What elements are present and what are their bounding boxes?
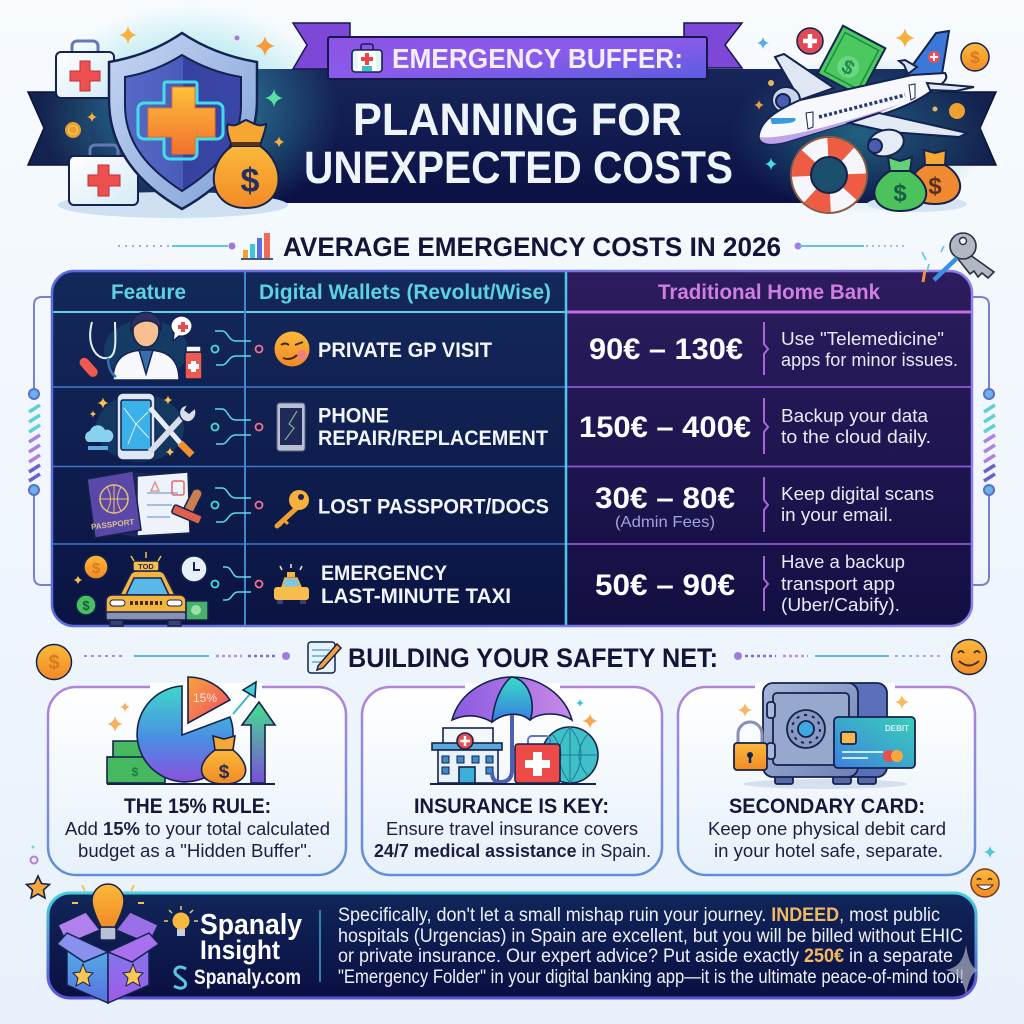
price: 50€ – 90€ <box>595 569 735 602</box>
tip: Have a backup <box>781 551 905 572</box>
card title: SECONDARY CARD: <box>729 795 925 818</box>
icon: green money bag <box>874 157 926 211</box>
icon: umbrella, hospital, kit and globe <box>430 677 598 784</box>
frame gap <box>150 683 262 691</box>
icon: lower first aid kit <box>69 145 138 205</box>
ground shadow <box>58 192 288 218</box>
connector circuit <box>212 488 262 522</box>
column headers: Digital Wallets (Revolut/Wise) <box>259 280 551 304</box>
icon: orange money bag <box>909 150 960 204</box>
icon: banknote <box>818 26 885 96</box>
icon: doctor <box>77 312 202 380</box>
icon: banknote: $ <box>838 56 858 80</box>
card frame <box>362 687 662 875</box>
watermark sparkle <box>945 945 978 995</box>
card text: Add 15% to your total calculated <box>65 818 330 839</box>
table body <box>52 271 972 626</box>
price: 150€ – 400€ <box>579 411 751 444</box>
ribbon text: EMERGENCY BUFFER: <box>392 43 683 74</box>
main title <box>304 94 733 193</box>
glow right <box>730 55 990 215</box>
icon: gold coin <box>961 43 989 71</box>
brace <box>764 398 768 454</box>
icon: safe, lock and debit card <box>734 683 915 784</box>
divider <box>319 910 321 982</box>
label: LAST-MINUTE TAXI <box>321 585 511 608</box>
icon: passport and stamp: PASSPORT <box>91 517 135 532</box>
banner right tail <box>900 92 996 165</box>
icon: open box with bulb <box>57 884 159 1003</box>
panel: insurance is key <box>362 677 662 875</box>
tip <box>781 405 931 447</box>
icon: small bulb <box>164 906 198 936</box>
label: PHONE <box>318 404 389 428</box>
card text: in your hotel safe, separate. <box>714 840 943 861</box>
icon: orange money bag: $ <box>928 173 942 200</box>
tip <box>781 483 934 525</box>
price: 30€ – 80€ <box>595 482 735 515</box>
icon: star <box>26 876 50 898</box>
icon: coin: $ <box>48 652 60 674</box>
side bracket left <box>29 297 52 585</box>
card text: 24/7 medical assistance in Spain. <box>374 840 651 861</box>
icon: top first aid kit <box>56 41 114 98</box>
ribbon left tail <box>293 23 350 69</box>
icon: money bag <box>214 120 279 208</box>
label <box>318 404 548 450</box>
icon: coin <box>36 644 72 680</box>
tip: Keep digital scans <box>781 483 934 504</box>
insight text: or private insurance. Our expert advice? Put aside exactly 250€ in a separate <box>338 945 953 967</box>
label: REPAIR/REPLACEMENT <box>318 427 548 450</box>
header right illustration <box>754 26 989 214</box>
main title: PLANNING FOR <box>353 94 682 145</box>
tip: Backup your data <box>781 405 929 426</box>
decorative accents near cards <box>30 846 996 864</box>
decorative rule right <box>734 652 742 660</box>
panel: cost table <box>52 271 972 626</box>
header left illustration <box>56 26 288 218</box>
heading text: BUILDING YOUR SAFETY NET: <box>348 643 718 673</box>
icon: taxi with coins and clock: TOD <box>138 562 154 571</box>
card text <box>708 818 946 861</box>
label: LOST PASSPORT/DOCS <box>318 496 549 518</box>
icon: pie, money and arrow: $ <box>132 765 139 779</box>
icon: smiley <box>952 640 986 674</box>
heading: building your safety net <box>36 640 986 680</box>
card frame <box>678 687 975 875</box>
tip: transport app <box>781 573 895 594</box>
brand name: Insight <box>200 935 280 965</box>
insight text <box>338 904 964 988</box>
brace <box>764 322 768 375</box>
ground shadow <box>867 196 967 212</box>
icon: key <box>277 490 309 526</box>
connector circuit <box>212 409 262 444</box>
heading text: AVERAGE EMERGENCY COSTS IN 2026 <box>283 232 781 262</box>
row 3: lost passport <box>87 471 934 538</box>
icon: wink emoji <box>274 332 310 366</box>
sparkles <box>107 702 130 732</box>
icon: bar chart <box>241 233 273 259</box>
card text <box>65 818 330 861</box>
card text: budget as a "Hidden Buffer". <box>78 840 312 861</box>
icon: notepad and pencil <box>308 642 341 673</box>
icon: pie, money and arrow: $ <box>219 762 230 783</box>
ribbon <box>328 37 707 79</box>
main title: UNEXPECTED COSTS <box>304 142 733 193</box>
medical cross <box>138 82 223 159</box>
sparkles <box>738 695 909 717</box>
decorative dotted rule left <box>118 245 170 247</box>
column headers <box>111 280 880 304</box>
side bracket right <box>972 297 995 585</box>
icon: first aid kit <box>352 44 382 72</box>
icon: green money bag: $ <box>893 180 907 207</box>
brand url: Spanaly.com <box>194 966 301 989</box>
brace <box>764 477 768 532</box>
decorative rule left <box>84 655 122 657</box>
label: PRIVATE GP VISIT <box>318 339 492 362</box>
banner main band <box>90 69 930 203</box>
panel: the 15% rule <box>48 677 346 875</box>
card text <box>374 818 651 861</box>
sparkles <box>754 28 965 170</box>
icon: pie, money and arrow <box>107 677 275 784</box>
insight text: hospitals (Urgencias) in Spain are excellent, but you will be billed without EHIC <box>338 925 963 947</box>
insight text: Specifically, don't let a small mishap ruin your journey. INDEED, most public <box>338 904 940 926</box>
tip: apps for minor issues. <box>781 349 958 370</box>
row 2: phone repair <box>85 393 931 462</box>
table border <box>52 271 972 626</box>
row 1: private GP visit <box>77 312 958 380</box>
connector circuit <box>212 567 262 600</box>
icon: small taxi <box>274 564 309 604</box>
card text: Ensure travel insurance covers <box>386 818 638 839</box>
column headers: Feature <box>111 280 186 304</box>
tip: to the cloud daily. <box>781 426 931 447</box>
brace <box>764 556 768 611</box>
ribbon right tail <box>684 23 742 68</box>
icon: taxi with coins and clock <box>74 552 208 626</box>
icon: cracked phone and tools <box>85 393 196 462</box>
tip: in your email. <box>781 504 893 525</box>
column headers: Traditional Home Bank <box>658 280 880 304</box>
icon: silver key and wrench <box>922 233 994 282</box>
tip <box>781 328 958 370</box>
banner left tail <box>28 92 110 165</box>
header banner <box>28 5 996 225</box>
shadow <box>743 779 907 789</box>
card frame <box>48 687 346 875</box>
sparkles <box>576 699 598 728</box>
icon: taxi with coins and clock: $ <box>82 598 90 613</box>
row 4: emergency taxi <box>74 551 905 626</box>
decorative dotted rule right <box>794 242 802 250</box>
glow left <box>40 5 340 225</box>
panel: secondary card <box>678 683 975 875</box>
label <box>321 562 511 608</box>
icon: plane <box>759 31 974 160</box>
icon: laughing emoji <box>971 869 999 897</box>
note: (Admin Fees) <box>615 514 715 531</box>
panel frame <box>48 893 976 998</box>
tip: (Uber/Cabify). <box>781 594 900 615</box>
icon: taxi with coins and clock: $ <box>92 560 101 577</box>
icon: money bag: $ <box>241 162 260 200</box>
heading: average costs <box>118 232 905 262</box>
icon: pie, money and arrow: 15% <box>193 691 217 705</box>
icon: passport and stamp <box>87 471 202 538</box>
card title: INSURANCE IS KEY: <box>414 795 609 818</box>
connector circuit <box>212 331 262 365</box>
card text: Keep one physical debit card <box>708 818 946 839</box>
price: 90€ – 130€ <box>589 333 743 366</box>
frame gap <box>755 683 895 691</box>
sparkles <box>65 26 284 148</box>
brand name <box>200 909 302 965</box>
label: EMERGENCY <box>321 562 447 585</box>
icon: gold coin: $ <box>970 48 980 67</box>
tip: Use "Telemedicine" <box>781 328 944 349</box>
icon: shield <box>109 33 257 209</box>
icon: red cross coin <box>797 28 823 54</box>
tip <box>781 551 905 615</box>
frame gap <box>465 683 560 691</box>
card title: THE 15% RULE: <box>124 795 271 818</box>
icon: safe, lock and debit card: DEBIT <box>885 724 909 733</box>
panel: Spanaly insight <box>48 884 976 1003</box>
icon: small phone <box>277 403 305 451</box>
brand name: Spanaly <box>200 909 302 941</box>
icon: lifebuoy <box>790 136 868 214</box>
